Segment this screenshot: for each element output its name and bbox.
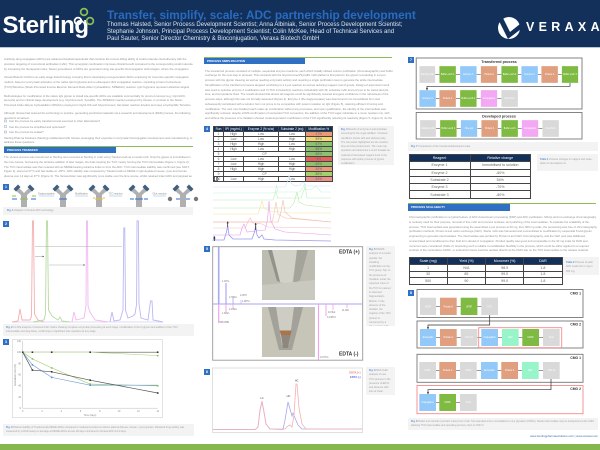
table: DoE runs: 5% [316,157,321,161]
figure 2 number [3,221,9,227]
table: DoE runs: 6 [218,157,219,161]
figure 8: CMO 1 first route: CMO 1 [570,292,581,296]
table: DoE runs: High [258,167,264,171]
blue label: PROCESS TRANSFER [7,148,38,152]
figure 8: CMO 1 second route [417,354,583,382]
table: reagent relative change: Reagent [433,156,446,160]
table: DoE runs: 67% [316,142,322,146]
figure 7: transferred process flow: Buffer exch 4 [462,97,476,100]
figure 2 caption [3,324,194,336]
question 1: Can the process be easily transferred and executed in other laboratories? [9,119,100,123]
figure 6 caption: Fig. 6 MAb chain analysis of new TCO process in the presence of EDTA and absence with loss of chain. [369,369,391,393]
figure 8: CMO 2 second route: CMO 2 [570,387,581,391]
figure 8 number: 8 [410,291,412,295]
figure 7: developed process flow: Buffer exch 1 [442,127,456,130]
figure 8 caption [408,418,598,430]
table: reagent relative change: 54% [497,178,504,182]
figure 3: stability line chart: 14 [156,410,160,413]
peak labels: 1.987d [242,300,250,303]
table: DoE runs: 85% [316,172,322,176]
figure 7: developed process flow: Developed process [482,114,516,118]
peak labels: 1.007e [222,280,230,283]
poster title: Transfer, simplify, scale: ADC partnership development [107,8,416,22]
figure 2: LC-MS traces across process steps [12,221,163,322]
figure 7: developed process flow: Final form [545,127,556,130]
figure 7: developed process flow: Starting mAb [421,127,435,130]
figure 6 caption [366,367,395,395]
figure 7: developed process flow: Protein A [485,127,495,130]
green trace [33,221,70,322]
table: DoE runs: 3 [218,142,219,146]
authors: Stephanie Johnson, Principal Process Development Scientist; Colin McKee, Head of Technical Services and [107,29,394,35]
table: DoE runs: High [258,177,264,181]
figure 6: chain analysis overlay chromatogram: HC [295,378,299,382]
table: DoE runs: Low [289,177,295,181]
figure 7: transferred process flow: Final form [504,97,515,100]
footer green band [0,444,600,450]
figure 8: CMO 1 first route: DS/IP [425,306,431,308]
table: DoE runs: CP [262,152,267,156]
table 2 caption [563,257,599,275]
table: DoE runs: Low [258,157,264,161]
footer website links: www.sterlingpharmasolutions.com | www.veraxa.com [530,434,598,438]
figure 3 caption [3,424,194,436]
table: DoE runs: 54% [316,177,322,181]
blue label [4,146,116,153]
peak labels: 11.96n [342,309,350,312]
figure 7 number: 7 [410,58,412,62]
table: scale-up results: 98.9 [501,266,508,270]
table: scale-up results: Monomer (%) [494,259,516,263]
table: DoE runs: High [289,167,295,171]
red trace [12,221,44,322]
green rule [204,57,392,58]
figure 3: stability line chart: 0 [22,410,24,413]
peak labels: 13.677e [320,356,329,359]
table: reagent relative change: -80% [496,193,504,197]
figure 6: chain analysis overlay chromatogram: LC [260,396,264,400]
figure 7: developed process flow: Conjugation [524,127,537,130]
Sterling logo wordmark: Sterling [2,12,89,39]
figure 3 number: 3 [5,340,7,344]
figure 7: transferred process flow: Protein A [484,73,494,76]
figure 3: stability line chart: 10 [118,410,121,413]
table: DoE runs: 59% [316,137,322,141]
figure 8: CMO 2 second route: Final [466,402,471,404]
table: scale-up results: Scale (mg) [419,259,437,263]
question 2: Can the process be simplified and optimised? [9,124,65,128]
figure 5 number: 5 [206,247,208,251]
figure 8: CMO 1 second route: CMO 1 [570,356,581,360]
table: DoE runs: High [289,147,295,151]
figure 8: CMO 1 first route [417,290,583,318]
centre axis [213,303,362,305]
peak labels: 505.2581 [220,321,230,324]
Sterling logo hexagon rings [75,9,93,24]
figure 7 number [408,57,414,63]
table: DoE runs: High [289,162,295,166]
table: DoE runs: Enzyme 2 (% w/w) [248,127,274,131]
figure 6: chain analysis overlay chromatogram [212,368,362,432]
figure 7: transferred process flow [416,58,582,109]
figure 8 number [408,290,414,296]
figure 8: CMO 2 first route [417,321,583,348]
figure 5 number [204,246,210,252]
table: DoE runs: High [230,147,237,151]
table: DoE runs: 65% [316,162,322,166]
figure 8: connector from CMO 1 to CMO 2 [428,315,490,329]
table: DoE runs: Low [231,162,236,166]
figure 8: CMO 1 second route: TCO int [547,369,556,372]
authors: Paul Sauter, Senior Director Chemistry & Bioconjugation, Veraxa Biotech GmbH [107,36,319,42]
table: DoE runs: Low [231,157,236,161]
table: scale-up results: 99.0 [501,272,508,276]
figure 3: stability line chart: 2 [41,410,43,413]
figure 6 number: 6 [206,370,208,374]
figure 3: stability line chart: 4 [61,410,63,413]
table: reagent relative change: -60% [496,171,504,175]
green rule [408,203,596,204]
table: scale-up results: 1.8 [540,279,545,283]
figure 7: transferred process flow: Enzyme 1 [463,74,474,76]
table: DoE runs: High [230,167,237,171]
table: scale-up results: 99.0 [501,279,508,283]
EDTA minus peaks [219,304,347,360]
table: scale-up results: 1.8 [540,266,545,270]
arrows linking species [35,246,122,265]
figure 2 number: 2 [5,222,7,226]
figure 1: ADC technology diagram [12,184,198,207]
trace label 10: 10 [213,177,219,183]
figure 1 caption: Fig. 1 Diagram of Veraxa ADC technology. [7,209,54,212]
blue label [204,58,305,64]
green rule [4,146,193,147]
figure 8: CMO 1 second route: Protein A [443,369,453,372]
blue trace [110,221,163,322]
figure 8: CMO 1 first route: Protein A [444,305,453,308]
baseline trace [12,321,163,323]
table: DoE runs: High [258,162,264,166]
table: DoE runs: 30% [316,167,322,171]
table: DoE runs: High [258,142,264,146]
figure 7: transferred process flow: Protein A [545,73,555,76]
figure 5: MS/MS mirror spectra with tube photos [213,247,363,360]
peak labels: 2.109m [229,308,237,311]
figure 3: stability line chart: 20 [18,396,22,399]
EDTA minus label: EDTA (-) [339,352,359,358]
figure 3: stability line chart: 8 [99,410,101,413]
table: DoE runs: 85% [316,152,322,156]
table: DoE runs: Low [289,142,295,146]
figure 3: stability line chart: 60 [18,374,22,376]
figure 3: stability line chart: 80 [18,362,22,366]
figure 8: CMO 2 second route [417,386,583,414]
authors: Thomas Halsted, Senior Process Development Scientist; Anna Albiniak, Senior Process Development Scientist; [107,22,402,28]
figure 3 number [3,339,9,345]
figure 8: CMO 2 second route: UFDF [445,402,451,404]
question bullets [4,120,6,133]
table: DoE runs: IPI (mg/mL) [225,127,242,131]
table: DoE runs: Low [289,157,295,161]
figure 8: CMO 2 first route: AEX [508,336,513,339]
figure 3: stability line chart: Normalised DAR (%) [14,364,17,386]
figure 1 number [3,184,9,190]
EDTA plus label: EDTA (+) [339,250,360,256]
figure 6: chain analysis overlay chromatogram: HC [287,394,290,398]
figure 8: CMO 2 first route: Conjugation [483,336,496,339]
figure 8: CMO 2 first route: UFDF [528,337,534,339]
figure 1 number: 1 [5,185,7,189]
peak labels: 14.987d [327,316,336,319]
figure 4 number: 4 [206,127,208,131]
table: scale-up results: 90 [464,279,468,283]
figure 4 number [204,126,210,132]
figure 8: CMO 1 second route: UFDF [465,370,472,372]
question 3: Can the process be scaled? [9,130,44,134]
figure 1: ADC technology diagram: Modification [75,192,89,196]
peak labels [220,280,350,359]
figure 8: CMO 2 first route: TCO int [465,336,473,339]
figure 1: ADC technology diagram: Click reaction [152,192,167,196]
table 1 caption: Table 1 Process changes in reagent and scale-down for developed run. [540,158,592,165]
table: DoE runs: Low [231,177,236,181]
table: DoE runs: Run [216,127,221,131]
figure 3: stability line chart: 100 [17,351,22,354]
figure 7: transferred process flow: Starting mAb [421,73,435,76]
table: DoE runs: 2 [218,137,219,141]
table: scale-up results: 500 [425,279,431,283]
figure 6: chain analysis overlay chromatogram: EDTA (+) [349,370,361,374]
table: DoE runs: Low [231,137,236,141]
intro paragraph 4: Although Veraxa had reduced the technology to practice, generating preclinical materials via a research and development (R&D) process, the following questions remained: [4,111,190,120]
table: DoE runs: 1 [218,132,219,136]
figure 1: ADC technology diagram: Deglycosylation [38,192,56,196]
table: DoE runs: High [230,142,237,146]
figure 2 caption: Fig. 2 LC-MS analysis of reduced mAb chains showing complete enzymatic processing at each stage, modification of the N-glycan and addition of the TCO intermediate and drug-linker, confirming no significant side reactions at any stage. [6,326,178,333]
peak labels: 1.829n [222,312,230,315]
table: DoE runs [213,126,333,182]
Veraxa logo mark [498,17,521,39]
figure 7: transferred process flow: Protein A [443,97,453,100]
table: DoE runs: Low [289,132,295,136]
table: DoE runs: 9 [218,172,219,176]
table: reagent relative change: -70% [496,185,504,189]
figure 7 caption [408,142,598,151]
table: DoE runs: 88% [316,147,322,151]
figure 7: transferred process flow: Enzyme 2 [524,74,535,76]
blue label: PROCESS SIMPLIFICATION [207,59,245,63]
table: scale-up results: 1 [427,266,429,270]
table: scale-up results: 30 [426,272,430,276]
table: reagent relative change: Enzyme 1 [432,163,447,167]
figure 8: CMO 1 first route: TCO [487,306,492,308]
figure 1: ADC technology diagram: TCO reaction [108,192,123,196]
figure 7: transferred process flow: Buffer exch 2 [503,73,517,76]
figure 6: chain analysis overlay chromatogram: EDTA (-) [350,375,361,379]
figure 3: stability line chart [12,340,162,418]
figure 3: stability line chart: 0 [20,407,22,410]
authors [107,22,402,42]
table: DoE runs: High [230,132,237,136]
closing paragraph: Sterling Pharma Solutions (Sterling) collaborated with Veraxa, leveraging their expertise in enzymatic bioconjugation development and manufacturing, to address these questions. [4,136,192,144]
figure 7: transferred process flow: Buffer exch 3 [563,73,577,76]
table: scale-up results: 85 [464,272,468,276]
figure 7: transferred process flow: Enzyme 3 [422,98,433,100]
figure 3: stability line chart: 40 [18,384,22,388]
figure 7: transferred process flow: Conjugation [483,97,496,100]
figure 3: stability line chart: Time (days) [84,414,96,417]
table: scale-up results: 1.8 [540,272,545,276]
tube photo, EDTA plus [262,250,315,300]
table: DoE runs: 8 [218,167,219,171]
table: DoE runs: Modification % [308,127,329,131]
header band [0,0,600,48]
table 2 caption: Table 2 Process of each ADC scale from 1 mg to 500 mg. [566,261,593,273]
table: DoE runs: 7 [218,162,219,166]
figure 8: CMO 2 first route: Protein A [444,336,453,339]
table: DoE runs: Substrate 2 (eq) [281,127,303,131]
figure 8: CMO 1 second route: AEX [528,369,533,372]
figure 8: connector between second-route CMOs [428,379,551,394]
figure 8: CMO 1 second route: Protein A [505,369,515,372]
tube photo, EDTA minus [262,307,315,357]
figure 8: CMO 2 first route: CMO 2 [570,322,581,326]
blue label: PROCESS SCALABILITY [411,205,445,209]
figure 3: stability line chart: 12 [137,410,140,413]
table: DoE runs: Low [258,147,264,151]
figure 7: transferred process flow: Buffer exch 1 [441,73,455,76]
figure 7: developed process flow: One-pot [465,127,474,130]
table 1 caption [537,154,598,171]
figure 6 number [204,369,210,375]
table: reagent relative change: Relative change [487,156,513,160]
table: DoE runs: 5 [218,152,219,156]
figure 4: stacked chromatograms [213,175,331,241]
table: DoE runs: 10 [217,177,220,181]
table: reagent relative change: Substrate 3 [430,193,449,197]
table: scale-up results: DAR [539,259,547,263]
figure 3: stability line chart: 6 [80,410,82,413]
figure 8: CMO 2 first route: Enzymatic [423,336,434,339]
figure 8: CMO 1 second route: DS/IP [425,370,431,372]
figure 8: CMO 2 first route: Final [549,337,554,339]
figure 7 caption: Fig. 7 Comparison of the transferred/developed scale. [411,145,471,148]
table: reagent relative change: Enzyme 3 [432,185,447,189]
table: DoE runs: 17% [316,132,322,136]
table: reagent relative change: Substrate 2 [430,178,449,182]
highlighted conjugation steps [479,328,562,348]
figure 8: CMO 1 second route: Enzymatic [484,369,495,372]
table: reagent relative change: Immobilised to solution [482,163,519,167]
table: reagent relative change: Enzyme 2 [432,171,447,175]
magenta trace [72,221,108,322]
blue label [408,204,510,210]
table: reagent relative change [409,154,531,199]
peak labels: 2.756m [229,296,237,299]
figure 8: CMO 1 first route: UFDF [466,306,473,308]
figure 8 caption: Fig. 8 Model tech transfer (contract manu) from 2 lab. Two standard and a consolidated to one glycation (CMO1). Sterile intermediate may be transported at the CMO allowing TCO intermediate and operating process, then to CMO 2. [411,420,594,427]
peak labels: 2.007f [240,294,247,297]
figure 3: stability line chart: 120 [17,340,22,343]
figure 1 caption [3,207,193,215]
figure 8: CMO 2 second route: Conjugation [421,401,434,404]
figure 7: transferred process flow: Transferred process [481,60,517,64]
peak labels: 10.5kd [328,311,336,314]
figure 7: developed process flow: Buffer exch [504,127,516,130]
table: DoE runs: High [289,137,295,141]
table: scale-up results [409,257,563,285]
table: scale-up results: N/A [463,266,469,270]
figure 3 caption: Fig. 3 Plasma stability of Trastuzumab-MMAE ADCs compared to marketed product at various plasma (Mouse, human, cyno) species. Retained drug activity was measured by a DAR assay on average at MMAE ADCs at over 28 days compared to Veraxa ADC at 14 days. [6,426,184,433]
figure 7: developed process flow [416,112,582,139]
table: DoE runs: Low [258,132,264,136]
table: DoE runs: 4 [218,147,219,151]
table: scale-up results: Yield (%) [459,259,474,263]
table: DoE runs: Low [258,137,264,141]
figure 4 caption: Fig. 4 Results of enzyme 2 and substrate screening for the sugar addition. Checked conditions shown with and without purity. The two points highlighted are the reaction time and the product team. The mean top operators and determine a much broader as material of decreased reagent level in the response with option process of glycan modification. [341,128,390,165]
table: DoE runs: CP [262,172,267,176]
EDTA plus peaks [219,247,241,304]
